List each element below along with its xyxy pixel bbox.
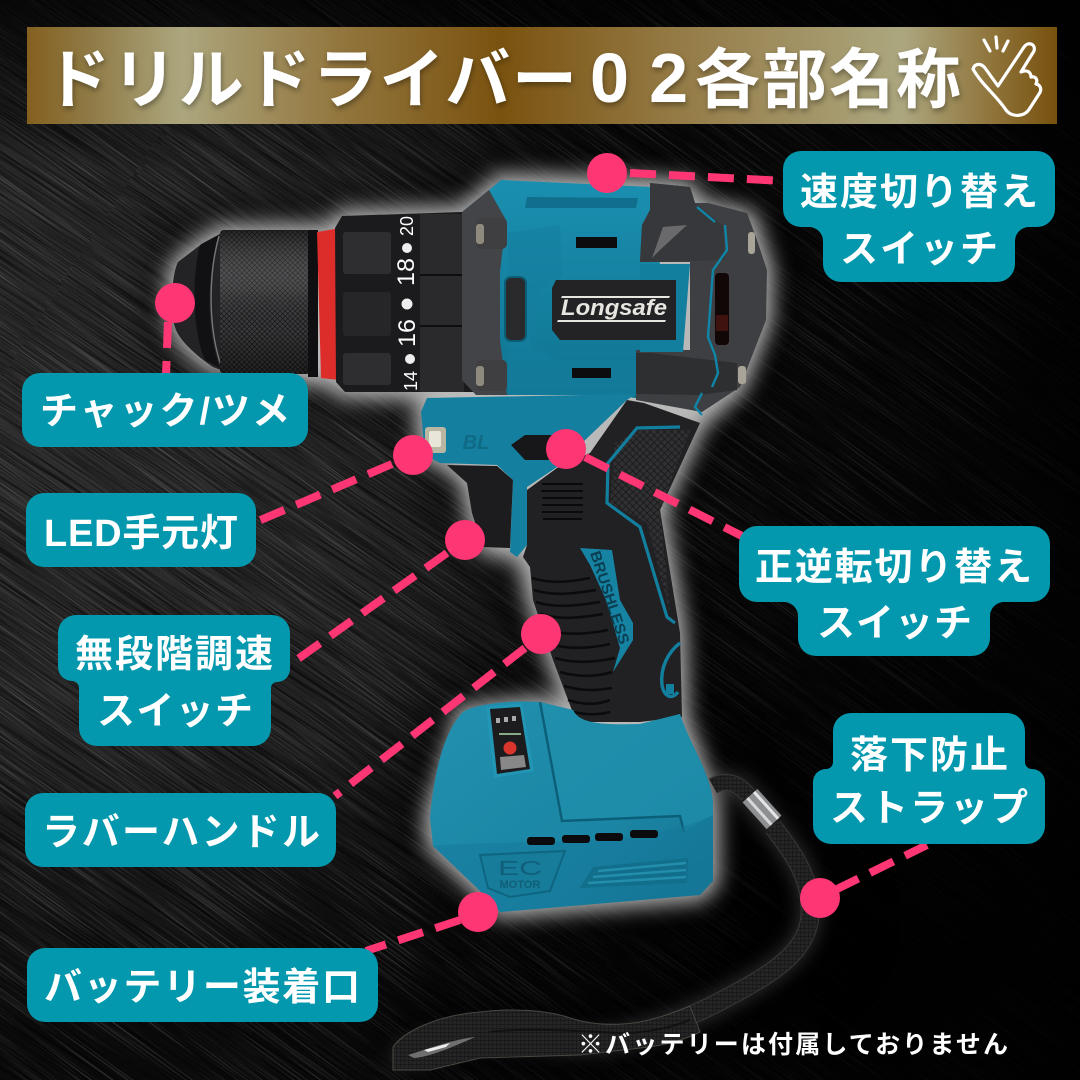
title text: number: 02 (590, 39, 688, 117)
collar with torque numbers: 16 (394, 319, 421, 347)
callout: LED (26, 493, 256, 567)
handle head and LED (421, 394, 636, 557)
teal accent lines (695, 207, 727, 415)
drill glow halo (172, 180, 810, 1062)
callout: battery mount (27, 948, 378, 1022)
motor housing (462, 180, 767, 415)
leader lines (166, 173, 927, 951)
collar with torque numbers: 18 (393, 258, 420, 286)
callout: speed switch (783, 151, 1055, 282)
EC motor emblem: EC (498, 858, 542, 880)
callout: direction switch: 正逆転切り替え (755, 547, 1032, 589)
drill (172, 180, 767, 912)
brushless badge: BRUSHLESS (586, 549, 632, 646)
collar with torque numbers (335, 212, 476, 392)
logo panel: Longsafe (561, 295, 667, 320)
callout: rubber handle: ラバーハンドル (42, 812, 320, 854)
title text: product name: ドリルドライバー (45, 43, 577, 116)
EC motor emblem: MOTOR (500, 879, 540, 891)
rear slot (715, 273, 729, 345)
brushless badge (580, 548, 633, 672)
collar with torque numbers: 20 (397, 216, 417, 236)
battery base (430, 701, 713, 912)
callout: chuck (22, 373, 308, 447)
callout: rubber handle (25, 793, 336, 867)
vent slots (527, 830, 658, 845)
callout: speed switch: 速度切り替え (800, 172, 1038, 214)
trigger (447, 465, 513, 548)
callout: speed switch: スイッチ (840, 229, 998, 271)
callout: variable speed switch: スイッチ (97, 691, 253, 733)
rear lower block (636, 353, 737, 395)
title banner (27, 27, 1057, 124)
callout: anti-drop strap: 落下防止 (850, 735, 1008, 777)
strap loop end (393, 1006, 700, 1070)
callout: anti-drop strap (813, 713, 1045, 844)
battery indicator panel (486, 703, 534, 778)
teal frame around logo (640, 264, 690, 352)
callout: anti-drop strap: ストラップ (830, 788, 1028, 830)
callout: battery mount: バッテリー装着口 (44, 967, 360, 1009)
rear top block (640, 183, 725, 262)
red ring (317, 229, 339, 380)
marker dots (155, 153, 840, 932)
collar with torque numbers: 14 (401, 371, 421, 391)
chuck (172, 230, 318, 377)
callout: variable speed switch: 無段階調速 (75, 634, 273, 676)
logo panel (552, 280, 676, 340)
callout: chuck: チャック/ツメ (40, 391, 290, 433)
strap (393, 782, 810, 1070)
strap ferrule (743, 789, 781, 829)
strap loop opening (408, 1037, 475, 1058)
callout: LED: LED手元灯 (44, 513, 238, 555)
callout: direction switch (739, 526, 1050, 656)
callout: direction switch: スイッチ (817, 603, 972, 645)
rear cap (636, 183, 767, 412)
battery note: ※バッテリーは付属しておりません (578, 1031, 1008, 1059)
housing bolts (476, 218, 755, 391)
callout: variable speed switch (58, 615, 290, 746)
handle head and LED: BL (463, 432, 489, 454)
title text: parts names: 各部名称 (695, 43, 961, 116)
EC motor emblem (480, 851, 565, 897)
side grille (580, 858, 688, 888)
icon: pointing hand (973, 37, 1041, 115)
rubber grip (523, 400, 700, 722)
